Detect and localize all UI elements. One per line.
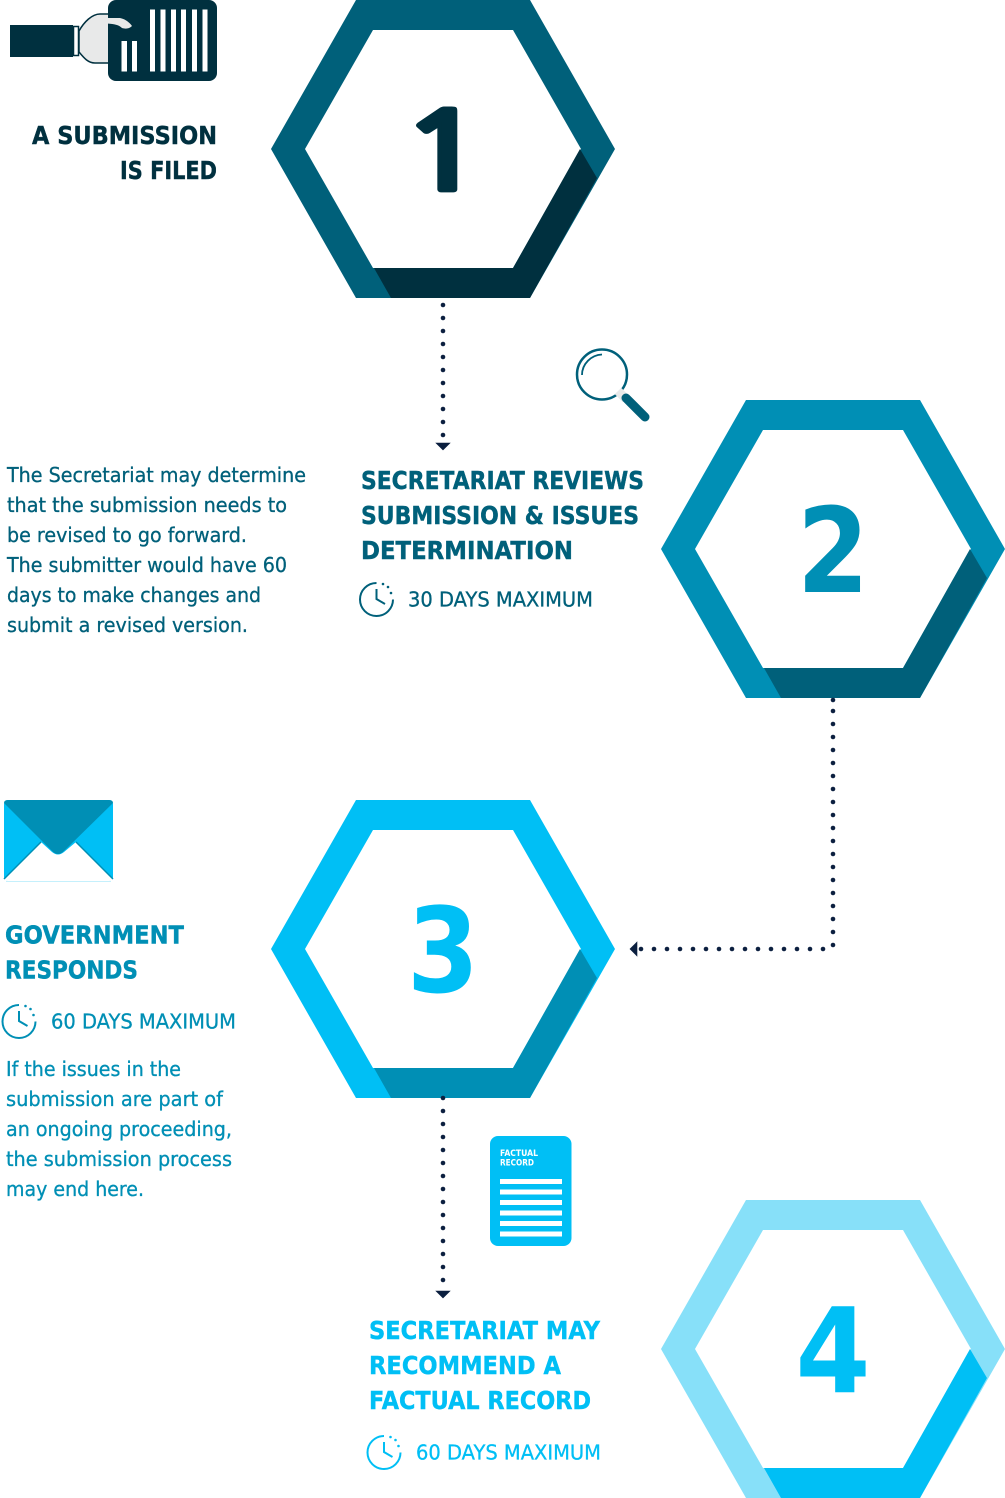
- icon: magnifying glass: [577, 350, 645, 417]
- heading: a submission is filed: IS FILED: [120, 156, 217, 185]
- icon: factual record document: FACTUAL: [500, 1149, 539, 1159]
- text block: revision note: be revised to go forward.: [7, 523, 247, 547]
- hexagon 3 with number: [271, 800, 615, 1098]
- text block: revision note: The Secretariat may determine: [6, 463, 306, 487]
- number 4: 4: [796, 1282, 870, 1420]
- hexagon 2 with number: [661, 400, 1005, 698]
- arrow: step 2 to step 3: [630, 698, 835, 956]
- text block: revision note: [6, 463, 306, 637]
- number 3: 3: [407, 882, 479, 1020]
- heading: secretariat reviews: DETERMINATION: [361, 536, 573, 565]
- heading: a submission is filed: [32, 121, 217, 185]
- heading: secretariat reviews: SECRETARIAT REVIEWS: [361, 466, 644, 495]
- hexagon 4 with number: [661, 1200, 1005, 1498]
- duration: 60 days maximum: 60 DAYS MAXIMUM: [51, 1010, 236, 1034]
- heading: secretariat may recommend a factual record: SECRETARIAT MAY: [369, 1316, 601, 1345]
- heading: secretariat may recommend a factual record: RECOMMEND A: [369, 1351, 562, 1380]
- icon: clock, 30 days: [360, 583, 393, 616]
- heading: government responds: GOVERNMENT: [5, 920, 184, 950]
- arrow: step 3 to step 4: [436, 1096, 450, 1298]
- duration: 30 days maximum: 30 DAYS MAXIMUM: [408, 588, 593, 612]
- text block: revision note: that the submission needs to: [7, 493, 287, 517]
- number 2: 2: [797, 482, 869, 620]
- heading: government responds: [5, 920, 184, 984]
- heading: secretariat may recommend a factual record: [369, 1316, 601, 1415]
- heading: secretariat reviews: SUBMISSION & ISSUES: [361, 501, 639, 530]
- text block: ongoing proceeding note: submission are part of: [6, 1087, 224, 1111]
- hexagon 1 with number: [271, 0, 615, 298]
- heading: government responds: RESPONDS: [5, 956, 138, 984]
- text block: ongoing proceeding note: an ongoing proceeding,: [6, 1117, 232, 1141]
- icon: clock, 60 days (step 4): [368, 1436, 400, 1469]
- text block: ongoing proceeding note: If the issues in the: [6, 1057, 181, 1081]
- text block: ongoing proceeding note: may end here.: [6, 1177, 144, 1201]
- heading: secretariat may recommend a factual record: FACTUAL RECORD: [369, 1386, 591, 1415]
- icon: factual record document: RECORD: [500, 1158, 534, 1168]
- text block: revision note: The submitter would have 60: [6, 553, 287, 577]
- heading: secretariat reviews: [361, 466, 644, 565]
- text block: revision note: days to make changes and: [7, 583, 261, 607]
- icon: clock, 60 days: [3, 1005, 36, 1038]
- icon: factual record document: [490, 1136, 572, 1246]
- duration: 60 days maximum (step 4): 60 DAYS MAXIMUM: [416, 1440, 601, 1464]
- heading: a submission is filed: A SUBMISSION: [32, 121, 217, 150]
- text block: ongoing proceeding note: the submission process: [6, 1147, 232, 1171]
- text block: ongoing proceeding note: [6, 1057, 232, 1201]
- number 1: 1: [399, 100, 489, 208]
- arrow: step 1 to step 2: [436, 303, 450, 450]
- icon: hand holding submission document: [10, 0, 217, 81]
- icon: envelope: [4, 800, 113, 882]
- text block: revision note: submit a revised version.: [7, 613, 248, 637]
